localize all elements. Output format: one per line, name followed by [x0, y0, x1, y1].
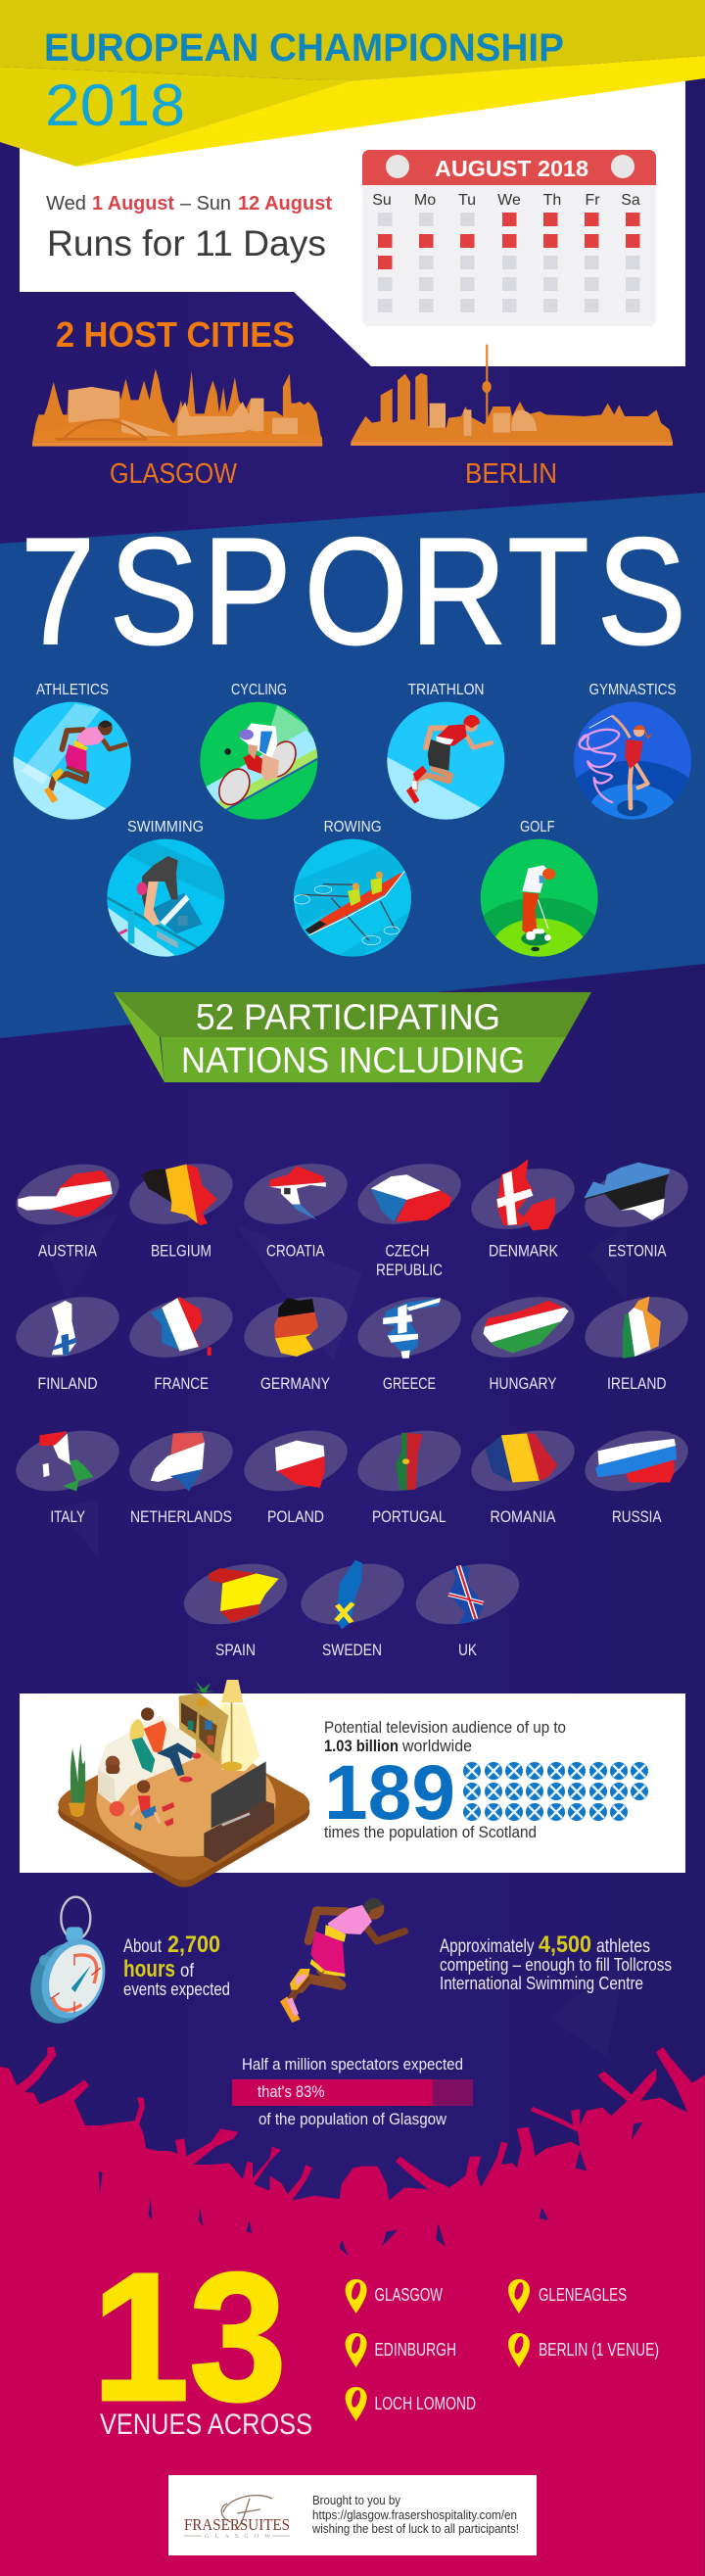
skyline: Berlin — [351, 345, 673, 446]
heading: 2 host cities: 2 HOST CITIES — [56, 314, 295, 355]
text: hours of events: events expected — [123, 1980, 230, 1999]
sport: swimming: SWIMMING — [127, 819, 204, 835]
skyline: Glasgow — [32, 369, 322, 447]
sport: athletics: ATHLETICS — [36, 682, 109, 698]
panel: sponsor footer — [168, 2475, 537, 2555]
flag: Hungary: HUNGARY — [490, 1374, 556, 1393]
sport: golf: GOLF — [520, 819, 555, 835]
flag: Greece — [351, 1286, 468, 1393]
flag: Germany — [237, 1286, 354, 1393]
flag: Austria — [9, 1154, 126, 1260]
banner: 52 participating nations: NATIONS INCLUDING — [181, 1040, 525, 1080]
flag: Netherlands — [122, 1420, 240, 1526]
dates text: 1 August — [92, 193, 174, 215]
text: hours of events: hours — [123, 1956, 175, 1982]
chart: spectators bar: of the population of Glasgow — [258, 2110, 447, 2128]
sport: cycling: CYCLING — [231, 682, 287, 698]
calendar: Mo — [414, 192, 436, 209]
flag: Poland: POLAND — [267, 1507, 324, 1526]
text: hours of events: About — [123, 1936, 163, 1957]
flag: Sweden — [294, 1553, 411, 1659]
title: EUROPEAN CHAMPIONSHIP — [44, 26, 564, 70]
text: athletes competing: 4,500 — [539, 1932, 591, 1958]
venue list: BERLIN (1 VENUE) — [539, 2340, 659, 2360]
sport: swimming — [107, 821, 225, 957]
calendar: Su — [372, 192, 392, 209]
dates text: – Sun — [180, 193, 231, 215]
panel: television audience — [20, 1693, 685, 1873]
calendar: Fr — [585, 192, 600, 209]
flag: Spain — [177, 1553, 294, 1659]
text: sponsor message: Brought to you by — [312, 2493, 400, 2507]
calendar: We — [497, 192, 521, 209]
text: sponsor message — [311, 2493, 519, 2536]
text: athletes competing: International Swimming Centre — [440, 1974, 643, 1993]
title — [44, 26, 564, 138]
flag: Finland — [9, 1286, 126, 1393]
flag: Italy: ITALY — [50, 1507, 85, 1526]
flag: Belgium: BELGIUM — [151, 1242, 212, 1260]
calendar: Sa — [621, 192, 640, 209]
flag: Germany: GERMANY — [260, 1374, 330, 1393]
stat: 13 venues: 13 — [92, 2236, 286, 2439]
chart: spectators bar — [232, 2055, 473, 2128]
text: television audience: worldwide — [401, 1737, 472, 1755]
banner: 52 participating nations — [114, 992, 591, 1082]
flag: Poland — [237, 1420, 354, 1526]
flag: Spain: SPAIN — [215, 1641, 256, 1659]
panel: white header panel — [20, 59, 685, 366]
sport: rowing: ROWING — [324, 819, 382, 835]
logo: Fraser Suites — [184, 2496, 290, 2540]
text: sponsor message: wishing the best of luck to all participants! — [311, 2521, 519, 2536]
sport: golf — [480, 821, 598, 957]
calendar: Tu — [458, 192, 476, 209]
heading: 7 sports: 7SPORTS — [21, 506, 686, 676]
dates text: Runs for 11 Days — [47, 223, 326, 263]
flag: Romania — [464, 1420, 582, 1526]
flag: Belgium — [122, 1153, 240, 1260]
text: athletes competing — [440, 1932, 672, 1993]
flag: Russia — [578, 1420, 695, 1526]
flag: UK: UK — [458, 1641, 478, 1659]
label: Berlin: BERLIN — [465, 458, 557, 490]
text: hours of events — [123, 1932, 230, 1999]
flag: Hungary — [464, 1286, 582, 1393]
text: sponsor message: https://glasgow.frasershospitality.com/en — [312, 2507, 517, 2522]
text: hours of events: 2,700 — [167, 1932, 220, 1958]
text: television audience: 1.03 billion — [324, 1737, 399, 1755]
flag: Estonia: ESTONIA — [608, 1242, 667, 1260]
banner: 52 participating nations: 52 PARTICIPATING — [196, 997, 500, 1037]
flag: Croatia — [237, 1153, 354, 1260]
flag: Czech Republic — [351, 1153, 468, 1279]
venue list: EDINBURGH — [374, 2340, 456, 2360]
dates text — [46, 193, 332, 263]
flag: Finland: FINLAND — [37, 1374, 98, 1393]
sport: rowing — [294, 819, 411, 963]
chart: spectators bar: Half a million spectators expected — [242, 2055, 463, 2074]
flag: Russia: RUSSIA — [612, 1507, 662, 1526]
logo: Fraser Suites: FRASERSUITES — [184, 2515, 290, 2534]
stat: 13 venues: VENUES ACROSS — [100, 2409, 312, 2441]
flag: Austria: AUSTRIA — [38, 1242, 98, 1260]
banner: yellow header shape — [0, 0, 705, 167]
text: television audience: times the population of Scotland — [324, 1823, 537, 1841]
flag: Portugal: PORTUGAL — [372, 1507, 446, 1526]
flag: Croatia: CROATIA — [266, 1242, 325, 1260]
sport: gymnastics — [574, 684, 691, 820]
flag: Greece: GREECE — [383, 1374, 436, 1393]
venue list — [346, 2279, 659, 2421]
flag: UK — [409, 1553, 526, 1659]
flag: Italy — [9, 1420, 126, 1526]
flag: Romania: ROMANIA — [490, 1507, 556, 1526]
venue list: GLASGOW — [374, 2285, 443, 2305]
text: hours of events: of — [180, 1961, 195, 1981]
calendar: Th — [543, 192, 561, 209]
sport: gymnastics: GYMNASTICS — [589, 682, 676, 698]
flag: Portugal — [351, 1420, 468, 1526]
sport: athletics — [14, 684, 131, 820]
flag: Denmark — [464, 1158, 582, 1260]
dates text: 12 August — [238, 193, 332, 215]
calendar: AUGUST 2018 — [435, 156, 588, 181]
icon: stopwatch — [20, 1897, 116, 2032]
flag: Netherlands: NETHERLANDS — [130, 1507, 232, 1526]
text: athletes competing: Approximately — [440, 1936, 535, 1957]
flag: France: FRANCE — [155, 1374, 209, 1393]
venue list: GLENEAGLES — [539, 2285, 627, 2305]
illustration: crowd silhouette — [0, 2046, 705, 2576]
label: Glasgow: GLASGOW — [110, 458, 238, 490]
flag: Czech Republic: REPUBLIC — [376, 1261, 443, 1279]
text: athletes competing: athletes — [596, 1936, 650, 1957]
sport: triathlon — [387, 684, 505, 820]
dates text: Wed — [46, 193, 86, 215]
title: 2018 — [45, 72, 185, 138]
flag: Estonia — [578, 1156, 695, 1260]
chart: spectators bar: that's 83% — [258, 2082, 325, 2101]
flag: Ireland: IRELAND — [607, 1374, 666, 1393]
flag: Czech Republic: CZECH — [386, 1242, 429, 1260]
text: television audience — [324, 1718, 566, 1841]
sport: cycling — [200, 682, 320, 820]
illustration: sprinter — [280, 1898, 404, 2023]
text: television audience: Potential television audience of up to — [324, 1718, 566, 1737]
venue list: LOCH LOMOND — [374, 2394, 476, 2413]
flag: Sweden: SWEDEN — [322, 1641, 382, 1659]
flag: Denmark: DENMARK — [489, 1242, 559, 1260]
logo: Fraser Suites: GLASGOW — [205, 2534, 270, 2540]
illustration: family watching television — [58, 1680, 309, 1887]
panel: blue sports band — [0, 493, 705, 1038]
icons: Scottish flags — [463, 1762, 648, 1821]
sport: triathlon: TRIATHLON — [407, 682, 484, 698]
text: television audience: 189 — [324, 1748, 455, 1836]
flag: France — [122, 1286, 240, 1393]
flag: Ireland — [578, 1286, 695, 1393]
calendar — [362, 150, 656, 326]
